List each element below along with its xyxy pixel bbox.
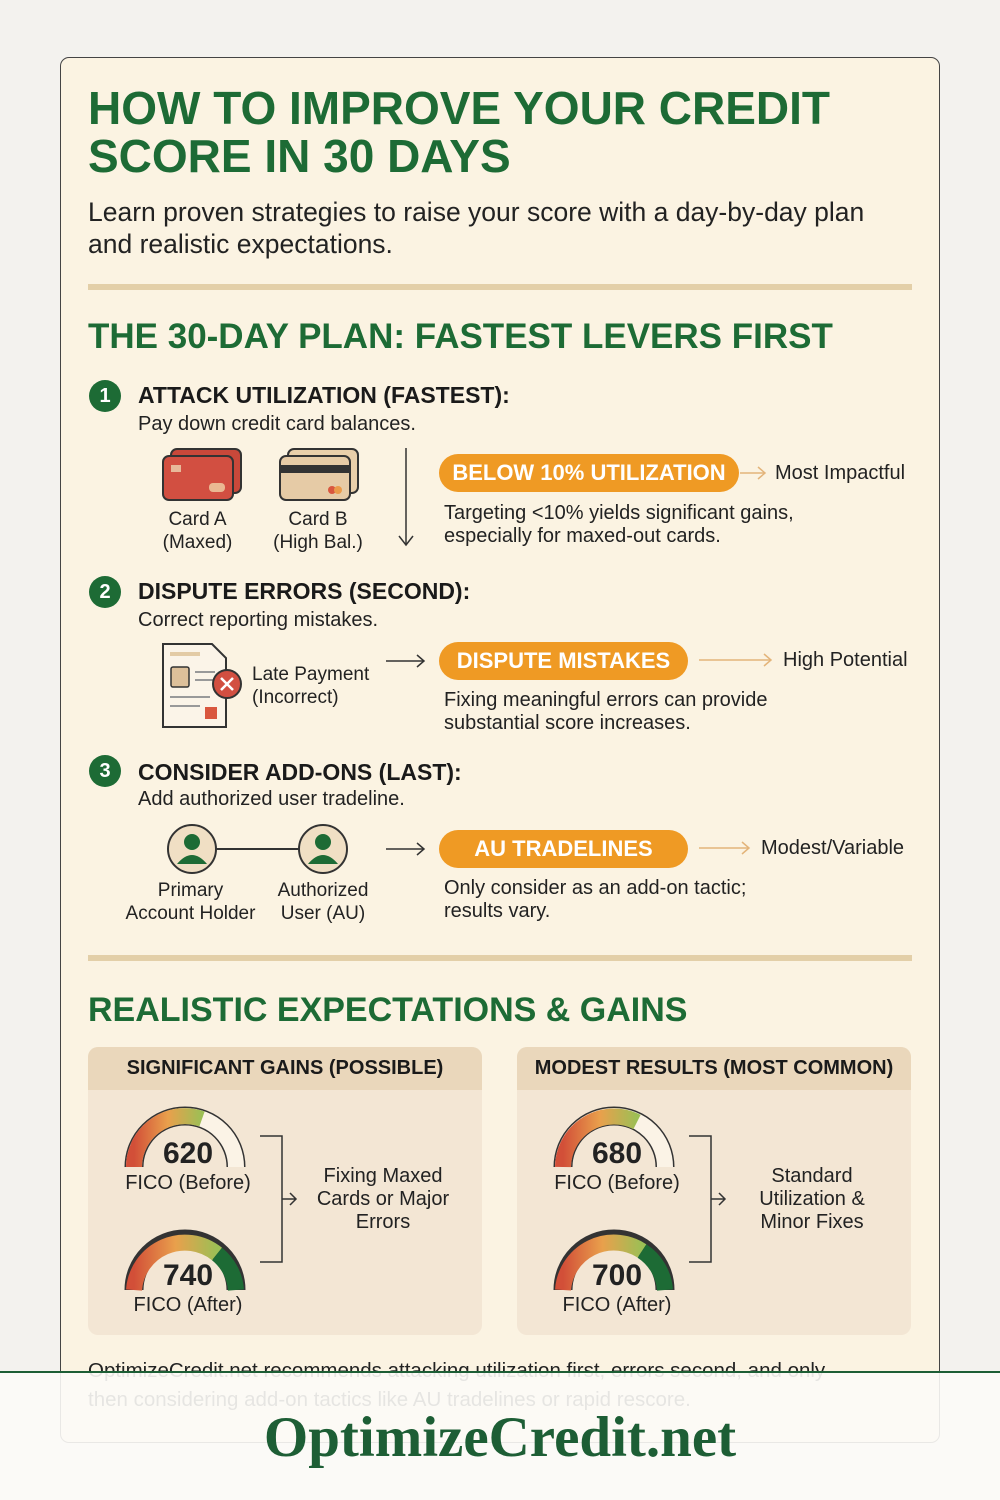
panel: modest results [517, 1047, 911, 1335]
pill 2 [439, 642, 688, 680]
outcome text: Standard [771, 1165, 853, 1187]
title: HOW TO IMPROVE YOUR CREDIT [88, 82, 830, 134]
pill 3 [439, 830, 688, 868]
step 3 [89, 755, 462, 810]
impact 3: Modest/Variable [761, 837, 904, 859]
panel: significant gains: FICO (Before) [125, 1172, 251, 1194]
subtitle: Learn proven strategies to raise your score with a day-by-day plan [88, 197, 864, 227]
label late payment [252, 664, 370, 708]
label card B: Card B [288, 509, 348, 530]
desc 2: substantial score increases. [444, 712, 691, 734]
number 1: 1 [99, 385, 111, 407]
bracket [689, 1135, 726, 1263]
number 2 [89, 576, 121, 608]
pill 3: AU TRADELINES [474, 836, 653, 861]
desc 3 [444, 877, 746, 922]
gauge 620 [124, 1106, 246, 1167]
label primary: Account Holder [126, 903, 255, 924]
desc 3: Only consider as an add-on tactic; [444, 877, 746, 899]
subtitle: and realistic expectations. [88, 229, 393, 259]
footer note: OptimizeCredit.net recommends attacking utilization first, errors second, and only [88, 1359, 825, 1382]
panel: significant gains: 620 [163, 1137, 213, 1170]
impact 1: Most Impactful [775, 462, 905, 484]
panel: significant gains [88, 1047, 482, 1335]
panel: significant gains: 740 [163, 1259, 213, 1292]
title [88, 82, 830, 182]
label card A: Card A [168, 509, 227, 530]
desc 1: Targeting <10% yields significant gains, [444, 502, 794, 524]
bracket [260, 1135, 297, 1263]
step 3 title: CONSIDER ADD-ONS (LAST): [138, 759, 462, 785]
label card A: (Maxed) [163, 532, 232, 553]
arrow 2a [386, 654, 425, 668]
outcome text: Cards or Major [317, 1188, 449, 1210]
panel header [88, 1047, 482, 1090]
label AU: User (AU) [281, 903, 365, 924]
outcome text [759, 1165, 865, 1233]
title: SCORE IN 30 DAYS [88, 130, 511, 182]
desc 1 [444, 502, 794, 547]
footer overlay band [0, 1371, 1000, 1500]
pill 2: DISPUTE MISTAKES [457, 648, 670, 673]
panel: modest results: 700 [592, 1259, 642, 1292]
icon: cards [162, 448, 359, 501]
number 3 [89, 755, 121, 787]
panel: modest results: FICO (Before) [554, 1172, 680, 1194]
number 1 [89, 380, 121, 412]
label primary: Primary [158, 880, 223, 901]
arrow 3b [699, 842, 750, 854]
label late payment: Late Payment [252, 664, 369, 685]
panel: modest results: FICO (After) [563, 1294, 671, 1316]
heading: expectations: REALISTIC EXPECTATIONS & GAINS [88, 991, 687, 1029]
step 1 title: ATTACK UTILIZATION (FASTEST): [138, 382, 510, 408]
number 3: 3 [99, 760, 111, 782]
panel: significant gains: FICO (After) [134, 1294, 242, 1316]
subtitle [88, 197, 864, 259]
step 1 desc: Pay down credit card balances. [138, 413, 416, 435]
label primary [126, 880, 256, 924]
label late payment: (Incorrect) [252, 687, 339, 708]
outcome text: Minor Fixes [760, 1211, 864, 1233]
label AU: Authorized [278, 880, 368, 901]
brand wordmark: OptimizeCredit.net [264, 1406, 736, 1469]
icon: document with error [162, 643, 242, 728]
step 2 desc: Correct reporting mistakes. [138, 609, 378, 631]
footer note [88, 1359, 825, 1411]
outcome text: Fixing Maxed [324, 1165, 442, 1187]
arrow 2b [699, 654, 772, 666]
icon: users [167, 824, 348, 874]
step 2 [89, 576, 470, 631]
panel header [517, 1047, 911, 1090]
impact 2: High Potential [783, 649, 908, 671]
desc 2 [444, 689, 768, 734]
label card B [273, 509, 363, 553]
arrow 1 [740, 466, 766, 480]
desc 2: Fixing meaningful errors can provide [444, 689, 768, 711]
panel header: SIGNIFICANT GAINS (POSSIBLE) [127, 1057, 443, 1079]
step 2 title: DISPUTE ERRORS (SECOND): [138, 578, 470, 604]
heading: 30-day plan: THE 30-DAY PLAN: FASTEST LEVERS FIRST [88, 317, 833, 356]
outcome text: Utilization & [759, 1188, 865, 1210]
pill 1 [439, 454, 739, 492]
pill 1: BELOW 10% UTILIZATION [452, 460, 726, 485]
footer note: then considering add-on tactics like AU tradelines or rapid rescore. [88, 1388, 691, 1411]
gauge 680 [554, 1106, 674, 1168]
arrow 3a [386, 842, 425, 856]
gauge 700 [554, 1230, 674, 1291]
step 1 [89, 380, 510, 435]
outcome text [317, 1165, 449, 1233]
panel header: MODEST RESULTS (MOST COMMON) [535, 1057, 893, 1079]
desc 1: especially for maxed-out cards. [444, 525, 721, 547]
outcome text: Errors [356, 1211, 410, 1233]
panel: modest results: 680 [592, 1137, 642, 1170]
step 3 desc: Add authorized user tradeline. [138, 788, 405, 810]
label AU [278, 880, 368, 924]
label card A [163, 509, 232, 553]
desc 3: results vary. [444, 900, 550, 922]
number 2: 2 [99, 581, 111, 603]
label card B: (High Bal.) [273, 532, 363, 553]
gauge 740 [124, 1230, 246, 1291]
arrow down [398, 448, 414, 546]
